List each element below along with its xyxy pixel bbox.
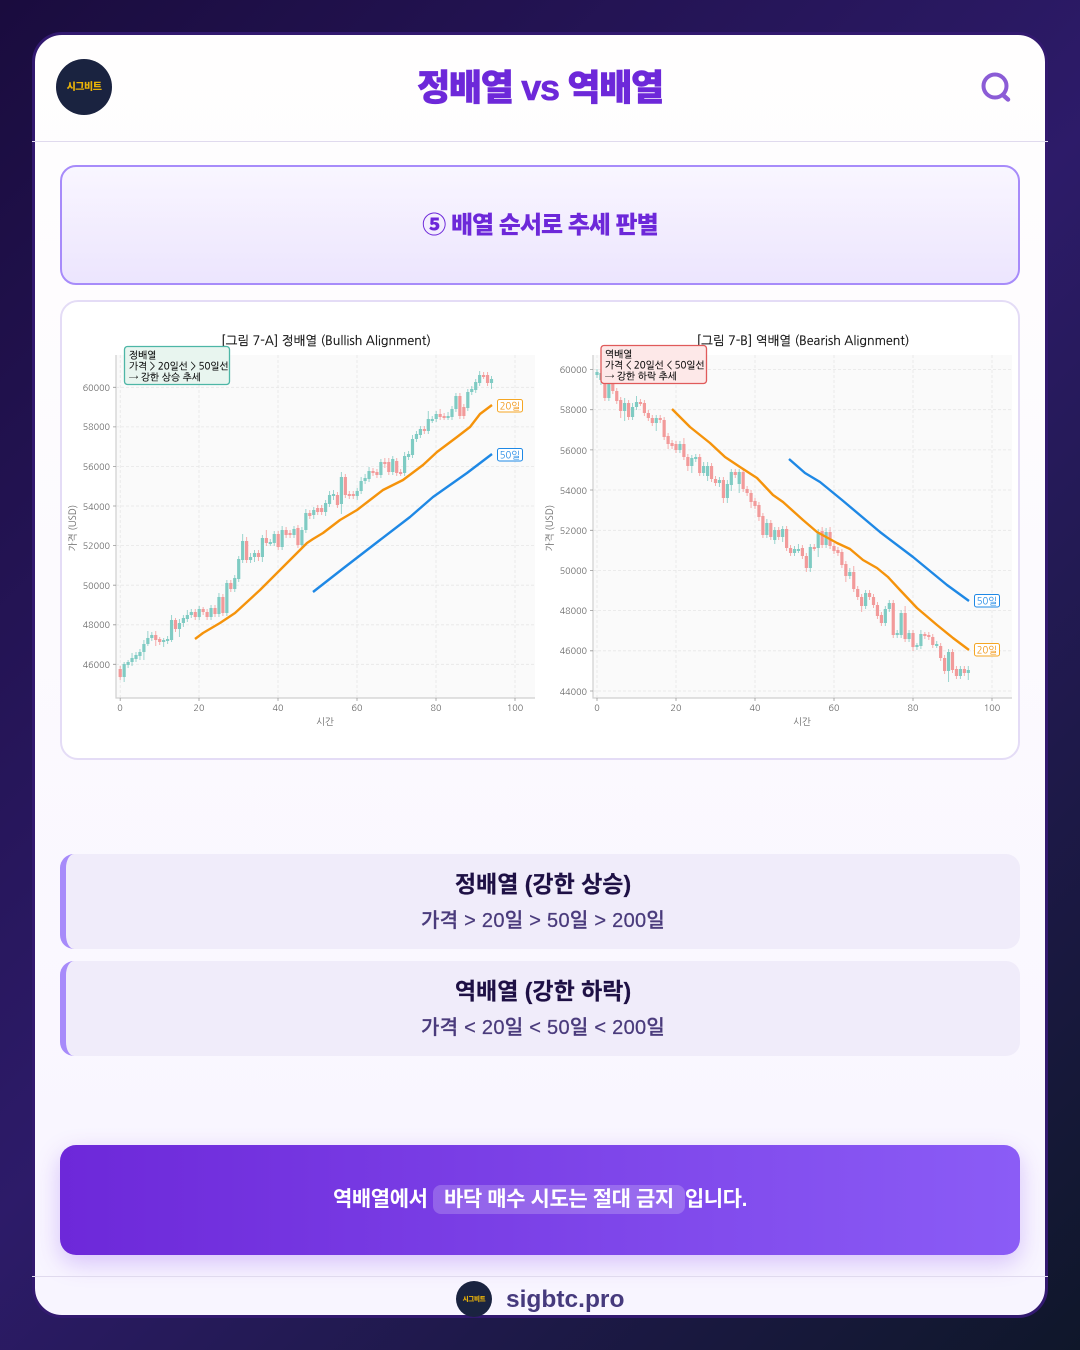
header divider bbox=[32, 141, 1048, 142]
chart: bullish alignment: 52000 bbox=[83, 542, 110, 551]
callout: bullish: 정배열 bbox=[129, 350, 156, 360]
callout: bearish: → 강한 하락 추세 bbox=[605, 372, 677, 382]
chart: bearish alignment: 56000 bbox=[560, 447, 587, 456]
chart: bullish alignment: 60 bbox=[352, 704, 362, 713]
card: bearish alignment rule bbox=[60, 961, 1020, 1056]
label: 50일 bbox=[974, 594, 1000, 607]
chart: bearish alignment: 60000 bbox=[560, 366, 587, 375]
logo: sigbtc header bbox=[56, 59, 112, 115]
card rule text: 가격 < 20일 < 50일 < 200일 bbox=[421, 1017, 665, 1039]
section banner: ⑤ 배열 순서로 추세 판별 bbox=[422, 205, 658, 240]
chart: bullish alignment: 80 bbox=[431, 704, 441, 713]
chart: bearish alignment: 54000 bbox=[560, 487, 587, 496]
chart: bearish alignment: 50000 bbox=[560, 567, 587, 576]
chart: bullish alignment: 20 bbox=[194, 704, 204, 713]
chart: bearish alignment: 40 bbox=[750, 704, 760, 713]
chart: bullish alignment: [그림 7-A] 정배열 (Bullish Alignment) bbox=[221, 334, 431, 347]
candlesticks bbox=[597, 369, 968, 682]
callout: bullish: → 강한 상승 추세 bbox=[129, 372, 201, 382]
chart: bearish alignment: 46000 bbox=[560, 647, 587, 656]
chart: bullish alignment: 가격 (USD) bbox=[68, 505, 78, 551]
footer url: sigbtc.pro bbox=[506, 1286, 624, 1313]
logo: sigbtc header: 시그비트 bbox=[67, 82, 101, 93]
label: 20일 bbox=[974, 644, 1000, 656]
chart: bearish alignment: 52000 bbox=[560, 527, 587, 536]
chart: bearish alignment: 20 bbox=[671, 704, 681, 713]
label: 20일: 20일 bbox=[977, 646, 997, 656]
chart: bullish alignment: 시간 bbox=[316, 717, 334, 727]
chart: bullish alignment: 56000 bbox=[83, 463, 110, 472]
line: 50-day MA bbox=[313, 454, 492, 592]
chart: bullish alignment: 48000 bbox=[83, 621, 110, 630]
chart: bullish alignment: 46000 bbox=[83, 661, 110, 670]
callout: bullish bbox=[124, 346, 230, 384]
label: 50일 bbox=[498, 448, 522, 461]
chart: bearish alignment: 0 bbox=[594, 704, 600, 713]
chart: bearish alignment: 시간 bbox=[793, 717, 811, 727]
line: 20-day MA bbox=[195, 405, 492, 639]
footer divider bbox=[32, 1276, 1048, 1277]
label: 50일: 50일 bbox=[977, 596, 997, 606]
panel: charts bbox=[60, 300, 1020, 760]
chart: bullish alignment: 40 bbox=[273, 704, 283, 713]
card rule text: 가격 > 20일 > 50일 > 200일 bbox=[421, 910, 665, 932]
icon: search bbox=[982, 72, 1010, 102]
chart: bearish alignment: 44000 bbox=[560, 688, 587, 697]
chart: bearish alignment: 80 bbox=[908, 704, 918, 713]
line: 50-day MA bbox=[789, 459, 969, 601]
chart: bearish alignment: 100 bbox=[984, 704, 1000, 713]
logo: sigbtc footer: 시그비트 bbox=[463, 1296, 485, 1303]
chart: bullish alignment: 54000 bbox=[83, 503, 110, 512]
callout: warning: 역배열에서 바닥 매수 시도는 절대 금지 입니다. bbox=[333, 1188, 747, 1211]
card: bullish alignment rule bbox=[60, 854, 1020, 949]
label: 20일 bbox=[498, 400, 522, 412]
logo: sigbtc footer bbox=[456, 1281, 492, 1317]
section banner bbox=[60, 165, 1020, 285]
callout: bearish: 역배열 bbox=[605, 350, 632, 360]
callout: bearish bbox=[601, 346, 706, 384]
chart: bullish alignment: 50000 bbox=[83, 582, 110, 591]
callout: bearish: 가격 < 20일선 < 50일선 bbox=[605, 360, 705, 370]
chart: bullish alignment: 58000 bbox=[83, 423, 110, 432]
card heading: 역배열 (강한 하락) bbox=[455, 978, 631, 1004]
chart: bullish alignment: 100 bbox=[507, 704, 523, 713]
chart: bullish alignment: 0 bbox=[117, 704, 123, 713]
chart: bearish alignment: 58000 bbox=[560, 406, 587, 415]
title: 정배열 vs 역배열 bbox=[417, 67, 663, 108]
line: 20-day MA bbox=[672, 409, 969, 650]
candlesticks bbox=[120, 371, 491, 682]
callout: warning bbox=[60, 1145, 1020, 1255]
chart: bearish alignment: 가격 (USD) bbox=[545, 505, 555, 551]
chart: bearish alignment: 60 bbox=[829, 704, 839, 713]
chart: bullish alignment bbox=[68, 334, 535, 727]
callout: bullish: 가격 > 20일선 > 50일선 bbox=[129, 362, 229, 372]
chart: bearish alignment: 48000 bbox=[560, 607, 587, 616]
chart: bearish alignment: [그림 7-B] 역배열 (Bearish Alignment) bbox=[697, 334, 909, 347]
card heading: 정배열 (강한 상승) bbox=[455, 870, 631, 896]
label: 50일: 50일 bbox=[500, 450, 520, 460]
chart: bearish alignment bbox=[545, 334, 1012, 727]
chart: bullish alignment: 60000 bbox=[83, 384, 110, 393]
label: 20일: 20일 bbox=[500, 402, 520, 412]
